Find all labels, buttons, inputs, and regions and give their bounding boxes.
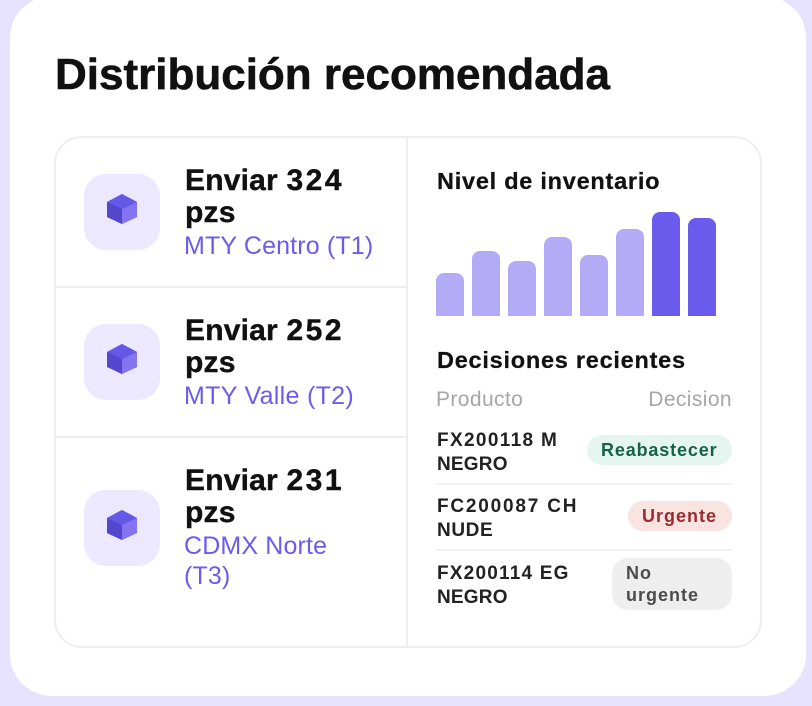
heading: shipment 2: Enviar 252 [185,314,344,347]
product: FC200087 [437,496,578,541]
panel: shipment 3 [84,464,344,590]
heading: shipment 2: pzs [185,346,236,379]
location: shipment 2: MTY Valle (T2) [184,382,354,410]
badge: no urgente: No [626,563,652,583]
heading: shipment 3: Enviar 231 [185,464,344,497]
badge: urgente [628,501,732,531]
row divider 1 [56,286,406,288]
location: shipment 3: (T3) [184,562,230,590]
product: FC200087: NUDE [437,520,493,541]
product: FX200114: NEGRO [437,587,508,608]
heading: inventory level: Nivel de inventario [437,168,660,194]
row divider 2 [56,436,406,438]
column header: product: Producto [436,388,523,411]
column divider [406,138,408,646]
icon: box 3 [84,490,160,566]
product: FX200114 [437,563,570,608]
heading: recent decisions: Decisiones recientes [437,347,686,373]
location: shipment 3 [184,532,327,590]
product: FX200114: FX200114 EG [437,563,570,584]
bar chart: inventory level [436,212,716,316]
product: FC200087: FC200087 CH [437,496,578,517]
row line 2 [436,549,732,551]
heading: shipment 3 [185,464,344,529]
panel: shipment 1 [84,164,373,260]
table: recent decisions [436,388,732,610]
title: Distribución recomendada [55,50,610,99]
heading: shipment 1: Enviar 324 [185,164,344,197]
icon: box 2 [84,324,160,400]
heading: shipment 1 [185,164,344,229]
badge: no urgente [612,558,732,610]
panel: recommendation container [54,136,762,648]
location: shipment 1: MTY Centro (T1) [184,232,373,260]
product: FX200118: FX200118 M [437,430,558,451]
icon: box 1 [84,174,160,250]
badge: reabastecer: Reabastecer [601,440,717,460]
product: FX200118 [437,430,558,475]
heading: shipment 1: pzs [185,196,236,229]
location: shipment 3: CDMX Norte [184,532,327,560]
product: FX200118: NEGRO [437,454,508,475]
badge: urgente: Urgente [642,506,717,526]
heading: shipment 3: pzs [185,496,236,529]
panel: shipment 2 [84,314,354,410]
badge: reabastecer [587,435,732,465]
badge: no urgente: urgente [626,585,699,605]
column header: decision: Decision [648,388,732,411]
heading: shipment 2 [185,314,344,379]
row line 1 [436,483,732,485]
